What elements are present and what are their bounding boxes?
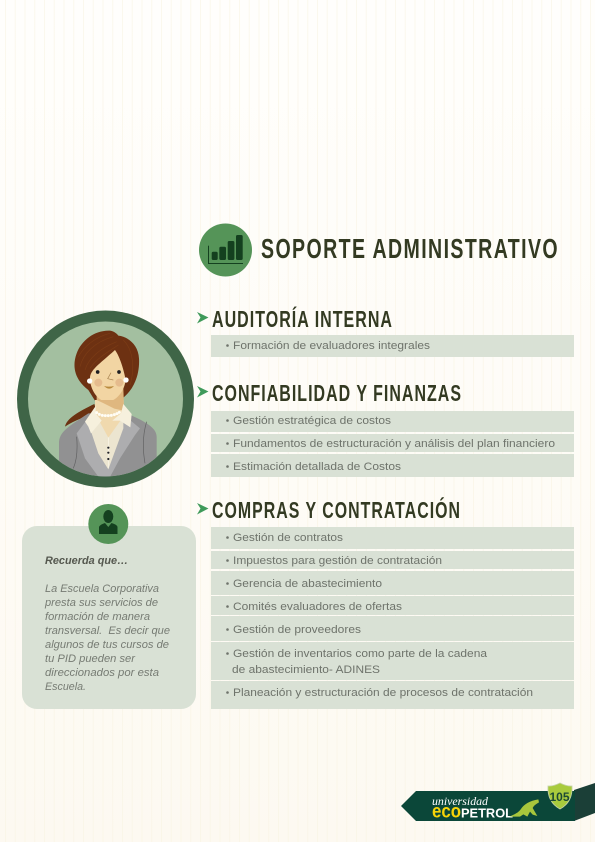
- list row: Comités evaluadores de ofertas: [233, 601, 402, 613]
- callout body: [44, 583, 170, 693]
- logo text: universidad: [432, 794, 489, 808]
- list row: [211, 527, 574, 549]
- portrait: woman in circle: [17, 310, 194, 488]
- list row: [211, 434, 574, 452]
- page number shield: [548, 783, 572, 809]
- list row: [211, 411, 574, 432]
- icon: bar chart badge: [199, 224, 252, 276]
- list row: Impuestos para gestión de contratación: [233, 555, 442, 567]
- callout heading: Recuerda que…: [45, 555, 128, 567]
- section: confiabilidad y finanzas: [197, 380, 574, 477]
- callout body: transversal. Es decir que: [45, 625, 170, 637]
- callout body: direccionados por esta: [45, 667, 159, 679]
- list row: Fundamentos de estructuración y análisis del plan financiero: [233, 438, 555, 450]
- callout body: formación de manera: [45, 611, 150, 623]
- icon: iguana: [509, 799, 539, 817]
- arrow: [197, 312, 208, 324]
- list row: Gestión estratégica de costos: [233, 415, 391, 427]
- heading: CONFIABILIDAD Y FINANZAS: [212, 380, 462, 406]
- arrow: [197, 386, 208, 398]
- list row: Gestión de contratos: [233, 532, 343, 544]
- arrow: [197, 503, 208, 514]
- list row: Gerencia de abastecimiento: [233, 578, 382, 590]
- heading: COMPRAS Y CONTRATACIÓN: [212, 496, 461, 523]
- page number shield: 105: [549, 790, 570, 804]
- list row: [211, 596, 574, 615]
- list row: [211, 335, 574, 357]
- callout body: Escuela.: [45, 681, 86, 693]
- list row: [211, 551, 574, 569]
- section: auditoría interna: [197, 305, 574, 357]
- footer banner: universidad ecopetrol: eco: [432, 802, 461, 822]
- list row: [211, 454, 574, 477]
- list row: [211, 571, 574, 595]
- list row: Planeación y estructuración de procesos de contratación: [233, 687, 533, 699]
- callout: recuerda que: [22, 504, 196, 709]
- list row: Gestión de inventarios como parte de la cadena: [233, 648, 488, 660]
- callout body: tu PID pueden ser: [45, 653, 135, 665]
- list row: [211, 616, 574, 641]
- section: compras y contratación: [197, 496, 574, 709]
- heading: AUDITORÍA INTERNA: [212, 305, 393, 332]
- list row: Estimación detallada de Costos: [233, 461, 401, 473]
- list row: Formación de evaluadores integrales: [233, 340, 430, 352]
- list row: Gestión de proveedores: [233, 624, 361, 636]
- footer banner: universidad ecopetrol: PETROL: [461, 806, 513, 820]
- icon: person badge: [88, 504, 128, 544]
- callout body: La Escuela Corporativa: [45, 583, 159, 595]
- footer banner: universidad ecopetrol: [401, 783, 595, 822]
- callout body: presta sus servicios de: [44, 597, 158, 609]
- callout body: algunos de tus cursos de: [45, 639, 169, 651]
- list row: [211, 681, 574, 709]
- list row: [211, 642, 574, 680]
- list row: de abastecimiento- ADINES: [232, 664, 380, 676]
